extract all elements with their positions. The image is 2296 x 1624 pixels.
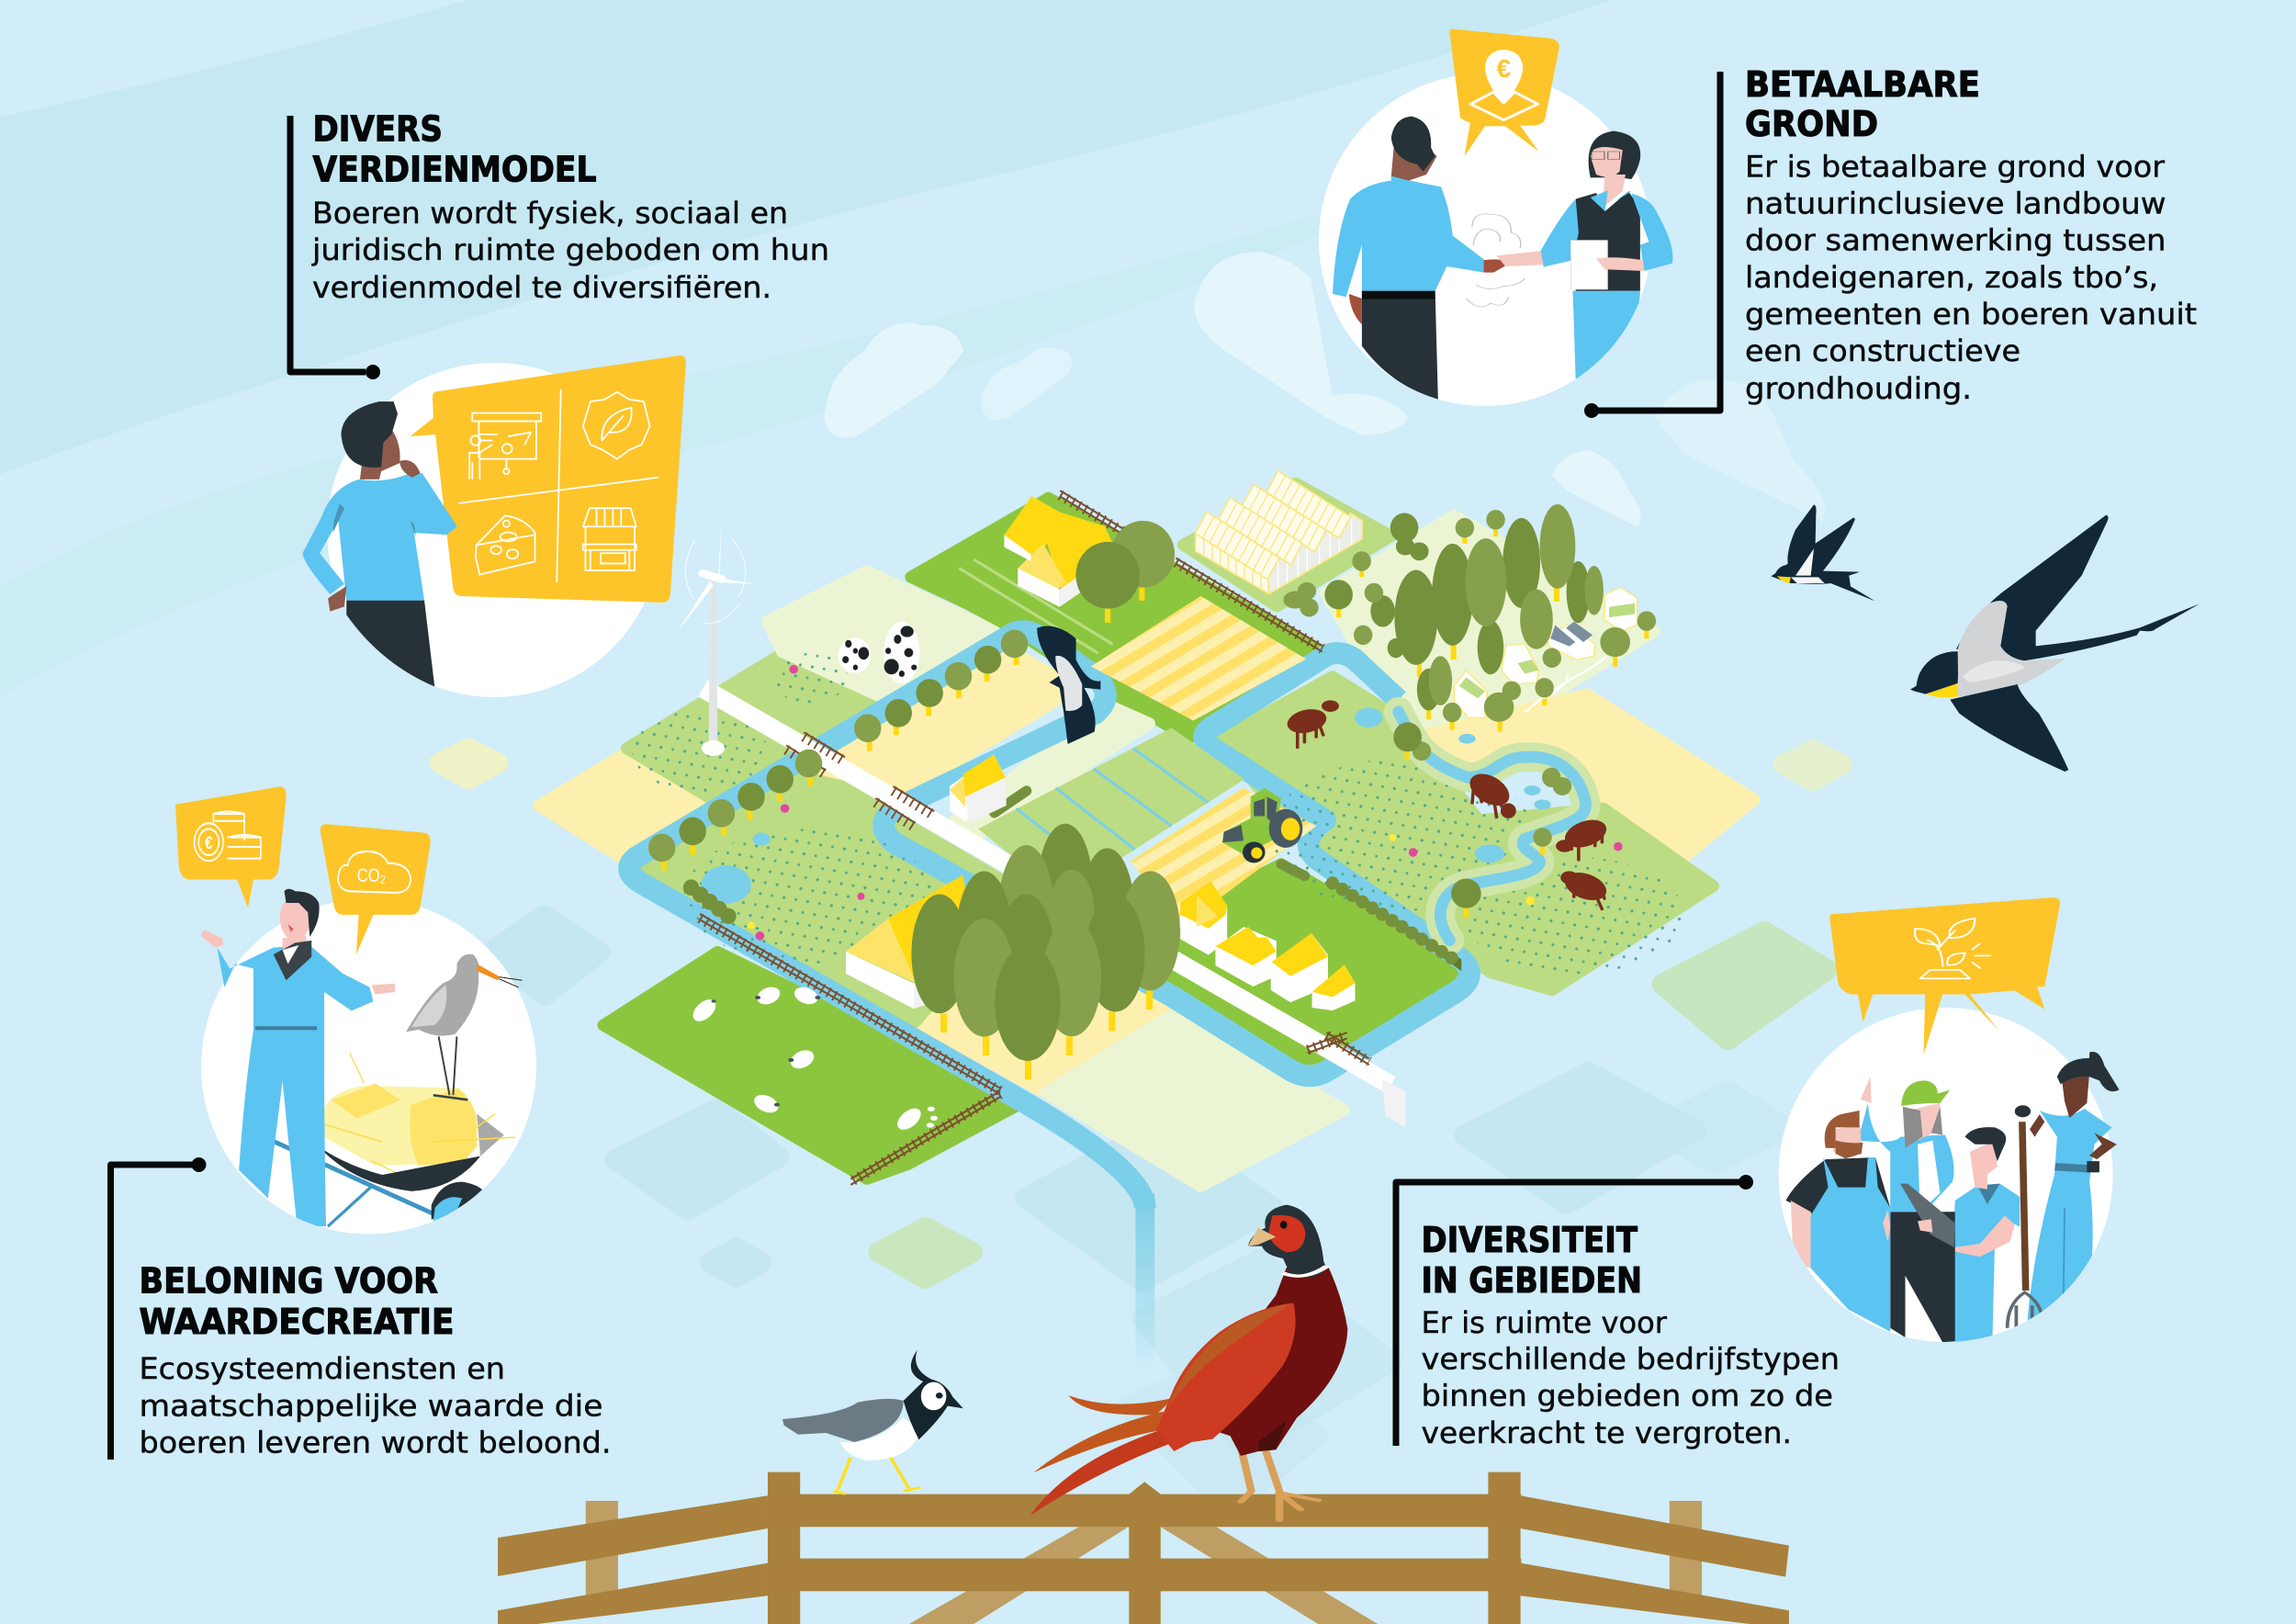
panel: beloning illustration <box>175 786 536 1235</box>
road <box>703 688 1406 1128</box>
body text: betaalbare grond: grondhouding. <box>1745 371 1972 406</box>
body text: beloning voor waardecreatie: boeren leveren wordt beloond. <box>140 1426 612 1460</box>
bird: small swallow <box>1771 504 1875 601</box>
heading: diversiteit in gebieden: DIVERSITEIT <box>1422 1220 1638 1260</box>
panel: diversiteit illustration <box>1779 897 2120 1342</box>
speech bubble with four icons <box>410 355 686 603</box>
body text: divers verdienmodel: juridisch ruimte geboden om hun <box>311 232 829 267</box>
forest <box>911 824 1180 1079</box>
body text: diversiteit in gebieden: verschillende bedrijfstypen <box>1422 1342 1840 1377</box>
greenhouses <box>1195 471 1362 594</box>
winding stream <box>1399 712 1586 941</box>
body text: betaalbare grond: een constructieve <box>1745 333 2020 368</box>
money bubble <box>175 786 287 908</box>
body text: diversiteit in gebieden <box>1422 1305 1840 1450</box>
trees and buildings in the north-east forest <box>1075 504 1656 918</box>
body text: diversiteit in gebieden: Er is ruimte voor <box>1422 1305 1668 1340</box>
heading: beloning voor waardecreatie <box>140 1260 454 1342</box>
holstein cows <box>838 622 919 683</box>
small house <box>950 754 1007 823</box>
callout: divers verdienmodel <box>290 108 829 379</box>
woman with cap and tablet <box>1858 1077 1955 1342</box>
body text: betaalbare grond <box>1745 150 2197 406</box>
body text: diversiteit in gebieden: veerkracht te vergroten. <box>1422 1415 1792 1450</box>
isometric farm map <box>539 471 1754 1370</box>
woman with fork <box>2008 1052 2120 1328</box>
tree rows <box>661 654 1019 871</box>
body text: beloning voor waardecreatie: maatschappelijke waarde die <box>140 1389 602 1424</box>
flower meadows <box>633 653 1684 974</box>
panel: betaalbare grond illustration <box>1319 28 1672 406</box>
crop fields <box>959 559 1316 926</box>
body text: divers verdienmodel: verdienmodel te diversifiëren. <box>312 270 771 305</box>
heading: divers verdienmodel <box>312 108 597 189</box>
heading: diversiteit in gebieden <box>1422 1220 1642 1301</box>
body text: divers verdienmodel: Boeren wordt fysiek, sociaal en <box>312 196 788 231</box>
man with tablet <box>1942 1127 2020 1342</box>
fences <box>700 491 1369 1185</box>
farm houses: top farm <box>1004 496 1113 607</box>
speech bubble with plant <box>1829 897 2060 1054</box>
heading: betaalbare grond <box>1745 64 1980 144</box>
man from behind <box>1333 117 1507 400</box>
money bubble: € <box>205 832 213 852</box>
man with beard <box>1785 1111 1890 1332</box>
flying lapwing <box>1037 626 1100 744</box>
callout: beloning voor waardecreatie <box>110 1157 612 1460</box>
body text: betaalbare grond: natuurinclusieve landbouw <box>1745 186 2166 221</box>
hedge <box>692 791 1461 971</box>
gate fence <box>498 1472 1789 1624</box>
body text: betaalbare grond: landeigenaren, zoals tbo’s, <box>1745 260 2158 295</box>
hay in wheelbarrow <box>270 1053 515 1226</box>
brown cows <box>1284 702 1611 909</box>
body text: betaalbare grond: door samenwerking tussen <box>1745 223 2166 258</box>
map tiles <box>539 483 1754 1186</box>
bird: large swallow <box>1910 515 2200 772</box>
body text: betaalbare grond: Er is betaalbare grond voor <box>1745 150 2166 185</box>
heading: beloning voor waardecreatie: BELONING VOOR <box>140 1260 438 1301</box>
turbine, tree rows, cows, village on the north-west side <box>648 524 1100 871</box>
body text: beloning voor waardecreatie: Ecosysteemdiensten en <box>140 1351 505 1386</box>
water channels <box>629 631 1469 1370</box>
village houses <box>1180 881 1356 1010</box>
sheep <box>688 985 938 1133</box>
wind turbine <box>676 524 756 756</box>
bird: pheasant <box>1030 1205 1347 1520</box>
callout: diversiteit in gebieden <box>1396 1175 1840 1450</box>
speech bubble with location pin: € <box>1496 54 1511 83</box>
heading: diversiteit in gebieden: IN GEBIEDEN <box>1422 1260 1642 1301</box>
body text: diversiteit in gebieden: binnen gebieden om zo de <box>1422 1379 1833 1414</box>
handshake cloud <box>1466 214 1525 307</box>
farmhouse <box>846 875 973 1009</box>
body text: beloning voor waardecreatie <box>140 1351 612 1460</box>
godwit <box>406 954 523 1100</box>
speech bubble with location pin <box>1450 28 1559 156</box>
heading: divers verdienmodel: VERDIENMODEL <box>312 149 597 189</box>
heading: betaalbare grond: BETAALBARE <box>1745 64 1980 105</box>
panel: divers verdienmodel illustration <box>302 355 686 697</box>
heading: divers verdienmodel: DIVERS <box>312 108 443 149</box>
co2 bubble <box>321 824 431 954</box>
tractor <box>1222 788 1302 863</box>
bird: lapwing <box>782 1349 963 1494</box>
co2 bubble: CO₂ <box>357 865 386 887</box>
body text: betaalbare grond: gemeenten en boeren vanuit <box>1745 297 2197 332</box>
heading: betaalbare grond: GROND <box>1745 104 1878 144</box>
body text: divers verdienmodel <box>311 196 829 305</box>
callout: betaalbare grond <box>1584 64 2197 418</box>
main farmhouse, sheep and forest <box>688 824 1180 1133</box>
man thinking <box>302 401 457 686</box>
heading: beloning voor waardecreatie: WAARDECREATIE <box>140 1302 454 1342</box>
farmer <box>201 889 395 1226</box>
woman with clipboard <box>1497 131 1672 379</box>
background tiles and clouds <box>439 252 1842 1508</box>
